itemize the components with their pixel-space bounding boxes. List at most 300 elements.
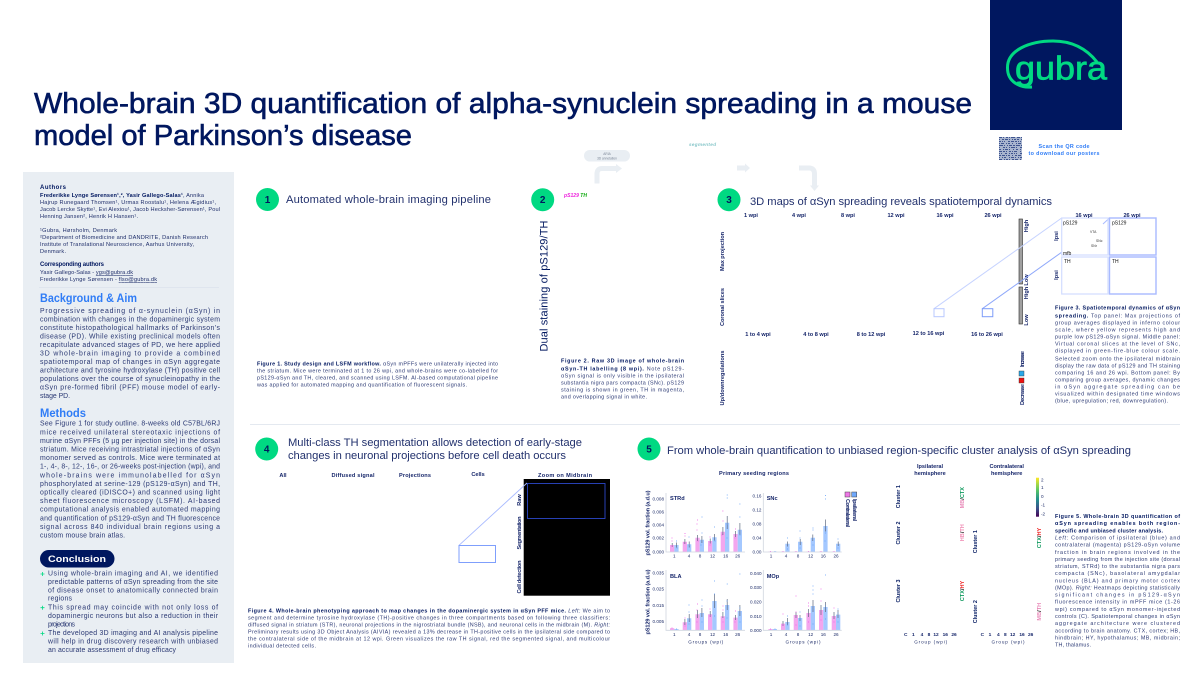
text: methods: murine αSyn PFFs (5 µg per injection site) in the dorsal [40, 438, 220, 445]
bar chart: BLA: 0.015 [652, 603, 664, 608]
text: methods: optically cleared (iDISCO+) and scanned using light [40, 490, 220, 496]
authors: Jacob Lercke Skytte¹, Evi Alexiou¹, Jacob Hecksher-Sørensen¹, Poul [40, 207, 220, 213]
bar chart: STRd: 0.002 [652, 536, 664, 540]
caption: figure 3: visualized within designated time windows [1055, 391, 1180, 397]
caption: figure 3: spreading. Top panel: Max projections of [1055, 313, 1180, 319]
bar chart: STRd: 0.006 [652, 510, 664, 514]
zoom panels: pS129 [1112, 220, 1127, 226]
caption: figure 5: primary seeding from the injection site (dorsal [1055, 557, 1180, 563]
heatmap x-axis: ipsilateral: Group (wpi) [914, 640, 948, 644]
text: methods: mice received unilateral stereotaxic injections of [40, 429, 220, 436]
bar chart: SNc: 0.12 [753, 508, 762, 512]
text: conclusion bullets: of disease onset to anatomically connected brain [48, 588, 218, 594]
arrow: bent up right [597, 164, 622, 184]
zoom boxes and connector lines [934, 218, 1110, 317]
chart heading: Primary seeding regions [719, 471, 789, 477]
caption: figure 5: significant changes in pS129-αSyn [1055, 593, 1180, 599]
heatmap x-axis: contralateral: 4 [997, 632, 1000, 638]
panel 3: 3D maps [718, 188, 1180, 406]
text: methods: See Figure 1 for study outline. 8-weeks old C57BL/6RJ [40, 421, 220, 428]
text: background [40, 308, 221, 400]
column labels: Cells [471, 472, 485, 478]
heading 4 [288, 437, 582, 462]
caption: figure 5: according to brain anatomy. CTX, cortex; HB, [1055, 628, 1180, 634]
colour scale: coronal: Low [1024, 314, 1030, 326]
heatmap x-axis: contralateral: 26 [1028, 632, 1034, 638]
arrow: right [737, 164, 750, 172]
badge 5 [638, 438, 660, 460]
caption: figure 3: comparing group averages, dynamic changes [1055, 377, 1180, 383]
bar chart: BLA: 8 [699, 632, 702, 637]
bar chart: STRd: 0.004 [652, 522, 664, 528]
logo: gubra [990, 0, 1122, 130]
bar chart: STRd: 26 [735, 554, 741, 558]
heading: background and aim: Background & Aim [40, 293, 137, 305]
text: methods: 1-, 4-, 8-, 12-, 16-, or 26-weeks post-injection (wpi), and [40, 464, 220, 471]
caption: figure 3: Figure 3. Spatiotemporal dynamics of αSyn [1055, 305, 1180, 311]
cluster labels [896, 485, 979, 623]
heading 5: From whole-brain quantification to unbiased region-specific cluster analysis of αSyn spreading [667, 445, 1131, 457]
row labels: Raw [517, 494, 523, 506]
cluster labels: Cluster 3 [896, 579, 902, 603]
logo: gubra: gubra [1015, 50, 1108, 86]
bar chart: SNc: 26 [833, 554, 839, 558]
caption: figure 4: segment and determine tyrosine hydroxylase (TH)-positive changes in three compartments based on following three classifiers: [248, 615, 610, 621]
region labels: HB/TH [960, 524, 966, 541]
authors [40, 185, 220, 283]
caption: figure 2: substantia nigra pars compacta (SNc). pS129 [561, 380, 684, 386]
text: methods [39, 421, 220, 540]
text: background: spatiotemporal map of changes in αSyn aggregate [40, 359, 220, 366]
QR code [999, 137, 1022, 160]
heading: methods: Methods [40, 408, 86, 420]
heatmap x-axis: contralateral: Group (wpi) [992, 640, 1025, 644]
caption: figure 5: controls (C). Spatiotemporal changes in αSyn [1055, 614, 1180, 620]
bar chart: MOp: 1 [770, 632, 773, 637]
text: conclusion bullets: Using whole-brain imaging and AI, we identified [48, 570, 218, 578]
bar chart: MOp: 0.000 [750, 628, 762, 633]
heatmap headers: hemisphere [991, 471, 1022, 477]
text: conclusion bullets: This spread may coincide with not only loss of [48, 604, 218, 611]
bar chart: STRd: 4 [688, 554, 691, 558]
caption: figure 3: group averages displayed in inferno colour [1055, 320, 1180, 326]
column labels: Zoom on Midbrain [538, 473, 593, 479]
text: conclusion bullets: predictable patterns of αSyn spreading from the site [48, 579, 218, 586]
caption: figure 2: αSyn-TH labelling (8 wpi). Note pS129- [561, 366, 684, 372]
column labels: time points: 8 wpi [841, 213, 855, 219]
heading 4: changes in neuronal projections before cell death occurs [288, 450, 566, 462]
zoom panels: 26 wpi [1123, 213, 1141, 219]
text: background: 3D whole-brain imaging to provide a combined [40, 350, 220, 358]
heatmap x-axis: ipsilateral: 12 [933, 632, 939, 638]
caption: figure 1: Figure 1. Study design and LSFM workflow. αSyn mPFFs were unilaterally injected into [257, 362, 498, 368]
y-axis labels: pS129 vol. fraction (a.d.u) [646, 490, 652, 556]
bar chart: STRd: 12 [710, 554, 715, 558]
caption: figure 2: and overlapping signal in white. [561, 394, 647, 400]
bar chart: SNc: 0.00 [753, 550, 762, 554]
caption: figure 1: was applied for automated mapping and quantification of fluorescent signals. [256, 382, 467, 388]
conclusion pill [40, 550, 114, 568]
cluster labels: Cluster 2 [896, 521, 902, 545]
column labels: Projections [399, 473, 431, 479]
authors: Frederikke Lynge Sørensen - flso@gubra.dk [40, 277, 157, 283]
bar chart: MOp: 26 [833, 632, 839, 637]
arrow: bent down [799, 168, 819, 191]
caption: figure 4: diffused signal in striatum (STR), neuronal projections in the nigrostriatal bundle (NSB), and neuronal cells in the midbrain (M). Right: [248, 622, 610, 628]
caption: figure 5: contralateral (magenta) pS129-αSyn volume [1055, 543, 1180, 549]
bar chart: MOp [750, 570, 842, 644]
bar chart: STRd: 8 [699, 554, 702, 558]
heatmap headers: hemisphere [914, 471, 946, 477]
caption: figure 3: in αSyn aggregate spreading can be [1055, 384, 1180, 390]
label: segmented: segmented [689, 142, 716, 147]
conclusion pill: Conclusion [48, 554, 106, 565]
bar chart: STRd: 0.008 [652, 496, 664, 502]
caption: figure 4: Preliminary results using 3D Object Analysis (AIVIA) revealed a 13% decrease in TH-positive cells in the ipsilateral side compared to [248, 629, 610, 635]
caption: figure 5: striatum, STRd) to the substantia nigra pars [1055, 564, 1180, 570]
caption: figure 3: displayed in green-fire-blue colour scale. [1055, 348, 1180, 354]
pipeline node: ARIA [584, 150, 630, 162]
row labels: Coronal slices [720, 288, 726, 326]
heatmap x-axis: ipsilateral: 16 [943, 632, 948, 638]
region labels [960, 487, 1043, 621]
caption: figure 5 [1054, 514, 1180, 648]
caption: figure 5: aggregate architecture were clustered [1055, 621, 1180, 627]
column labels: time points: 1 wpi [744, 213, 758, 219]
caption: figure 2: αSyn signal is only visible in the ipsilateral [561, 373, 684, 379]
caption: figure 2 [561, 358, 684, 400]
heatmap x-axis: ipsilateral: 1 [912, 632, 915, 638]
QR caption: to download our posters [1028, 151, 1100, 157]
bar chart: STRd: 0.000 [652, 550, 664, 554]
text: methods: and quantification of pS129-αSyn and TH fluorescence [40, 515, 220, 522]
zoom panels: Ipsi [1054, 231, 1060, 241]
zoom panels: TH [1112, 259, 1119, 265]
panel: sidebar [23, 172, 234, 663]
zoom panels: VTA [1090, 230, 1097, 234]
heatmap x-axis: contralateral: 8 [1004, 632, 1007, 638]
caption: figure 3: purple low pS129-αSyn signal. Middle panel: [1055, 334, 1180, 340]
authors: Institute of Translational Neuroscience, Aarhus University, [40, 242, 194, 248]
heatmap x-axis: contralateral [981, 632, 1034, 644]
bar chart: STRd [652, 493, 745, 558]
text: background: Progressive spreading of α-synuclein (αSyn) in [40, 308, 220, 315]
heading 4: Multi-class TH segmentation allows detection of early-stage [288, 437, 582, 449]
bar chart: BLA: 16 [723, 632, 729, 637]
caption: figure 5: hindbrain; HY, hypothalamus; MB, midbrain; [1055, 635, 1180, 641]
bar chart: BLA: Groups (wpi) [688, 640, 724, 644]
bar chart: BLA: 0.005 [652, 619, 664, 624]
column labels: time points: 4 wpi [792, 213, 806, 219]
column labels: All [279, 473, 287, 479]
panel 1: pipeline [256, 188, 498, 388]
column labels: Diffused signal [332, 473, 375, 479]
bar chart: STRd: 16 [723, 554, 729, 558]
authors: Denmark. [40, 249, 66, 255]
bar chart: SNc: 0.08 [753, 522, 762, 526]
bar chart: BLA: 0.035 [652, 570, 664, 576]
caption: figure 5: (MOp). Right: Heatmaps depicting statistically [1055, 586, 1180, 592]
cluster labels: Cluster 1 [973, 530, 979, 553]
zoom panels: SNr [1091, 244, 1098, 248]
text: conclusion bullets: an accurate assessment of drug efficacy [48, 647, 177, 654]
caption: figure 5: TH, thalamus. [1055, 642, 1091, 648]
caption: figure 4: Figure 4. Whole-brain phenotyping approach to map changes in the dopaminergic system in αSyn PFF mice. Left: We aim to [248, 608, 610, 614]
text: background: stage PD. [40, 393, 70, 400]
row labels [720, 231, 726, 406]
colour scale: coronal: High [1024, 286, 1030, 299]
bar chart: STRd: 1 [673, 554, 676, 558]
caption: figure 5: nucleus (BLA) and primary motor cortex [1055, 578, 1180, 584]
heatmap x-axis: ipsilateral: 8 [928, 632, 931, 638]
legend: increase and decrease: Decrease [1020, 384, 1026, 405]
region labels: MB/CTX [960, 487, 966, 508]
bar chart: MOp: 12 [808, 632, 814, 637]
caption: figure 1: pS129-αSyn and TH, cleared, and scanned using LSFM. AI-based computational pipeline [257, 375, 498, 381]
authors: ²Department of Biomedicine and DANDRITE, Danish Research [40, 235, 208, 241]
zoom panels: TH [1064, 259, 1071, 265]
bar chart: MOp: 0.010 [750, 614, 762, 619]
zoom panels: mfb [1063, 251, 1072, 257]
text: methods: whole-brains were immunolabelled for αSyn [39, 472, 220, 479]
pipeline node: ARIA: ARIA [603, 152, 612, 156]
bar chart: BLA: 1 [673, 632, 676, 637]
colour scale: heatmap: -2 [1041, 512, 1046, 516]
colour scale: heatmap: -1 [1041, 502, 1046, 508]
heatmap x-axis: ipsilateral: C [904, 632, 908, 638]
caption: figure 3: display the raw data of pS129 and TH staining [1055, 363, 1180, 369]
caption: figure 4: individual detected cells. [248, 643, 316, 649]
text: methods: phosphorylated at serine-129 (pS129-αSyn) and TH, [40, 481, 220, 488]
badge 1: 1 [265, 195, 271, 206]
badge 2: 2 [540, 195, 546, 206]
heatmap x-axis: ipsilateral [904, 632, 957, 644]
bar chart: BLA: 12 [710, 632, 715, 637]
caption: figure 5: compacta (SNc), basolateral amygdalar [1055, 571, 1180, 577]
bar chart: SNc: 4 [785, 554, 788, 558]
caption: figure 5: αSyn spreading enables both region- [1055, 521, 1180, 527]
bar chart: MOp: 0.040 [750, 571, 762, 576]
row labels [517, 494, 523, 594]
colour scale: heatmap: 1 [1041, 485, 1044, 490]
caption: figure 3: (blue, upregulation; red, downregulation). [1055, 398, 1168, 404]
text: conclusion bullets: dopaminergic neurons but also a reduction in their [48, 613, 219, 620]
chart legend: Contralateral [844, 499, 850, 527]
text: conclusion bullets: will help in drug discovery research with unbiased [47, 638, 218, 646]
title: Whole-brain 3D quantification of alpha-synuclein spreading in a mouse [34, 88, 972, 120]
legend: increase and decrease [1019, 351, 1026, 405]
cluster labels: Cluster 2 [973, 600, 979, 623]
column labels: time points [744, 213, 1002, 219]
bar chart: SNc: 8 [797, 554, 800, 558]
bar chart: SNc: 1 [770, 554, 773, 558]
midbrain zoom image [524, 479, 610, 596]
legend: increase and decrease: Increase [1020, 351, 1026, 367]
bar chart: SNc: 0.04 [753, 536, 762, 540]
bar chart: SNc: 16 [821, 554, 826, 558]
bar chart: SNc: 12 [808, 554, 814, 558]
channel legend: pS129 TH [563, 193, 587, 199]
heatmap headers: Ipsilateral [917, 464, 944, 470]
text: background: constitute histopathological hallmarks of Parkinson’s [40, 325, 221, 332]
panel 2: raw image [531, 188, 684, 400]
text: methods: custom mouse brain atlas. [40, 532, 125, 540]
bar chart: BLA: 26 [735, 632, 741, 637]
authors: Authors [40, 185, 67, 191]
authors: Hajrup Runegaard Thomsen¹, Urmas Roostalu¹, Helena Ægidius¹, [40, 200, 216, 206]
authors: Yasir Gallego-Salas - ygs@gubra.dk [40, 270, 133, 276]
caption: figure 3: comparing 16 and 26 wpi. Bottom panel: By [1055, 370, 1180, 376]
text: background: combination with changes in the dopaminergic system [40, 316, 220, 324]
text: methods: sheet fluorescence microscopy (LSFM). AI-based [40, 498, 220, 505]
caption: figure 5: wpi) compared to αSyn monomer-injected [1054, 607, 1180, 613]
region labels: CTX/HY [960, 580, 966, 601]
heading 1: Automated whole-brain imaging pipeline [286, 194, 491, 206]
row labels: Segmentation [517, 516, 523, 550]
text: conclusion bullets: The developed 3D imaging and AI analysis pipeline [48, 630, 218, 637]
colour scale: heatmap: 0 [1041, 494, 1044, 499]
text: methods: striatum. Mice receiving intrastriatal injections of αSyn [40, 446, 220, 454]
caption: figure 5: fraction in brain regions involved in the [1055, 550, 1180, 556]
heatmap x-axis: contralateral: C [981, 632, 985, 638]
column labels: time windows: 12 to 16 wpi [913, 331, 945, 337]
text: background: recapitulate advanced stages of PD, we here applied [40, 342, 220, 349]
bar chart: MOp: MOp [767, 574, 780, 580]
title: model of Parkinson’s disease [34, 120, 412, 152]
y-axis labels [646, 490, 652, 634]
text: background: disease (PD). While existing preclinical models often [40, 334, 220, 340]
column labels: time points: 26 wpi [984, 213, 1002, 219]
column labels [279, 472, 593, 479]
column labels: time windows: 4 to 8 wpi [803, 332, 829, 338]
bar chart: BLA: 4 [688, 632, 691, 637]
pipeline node: ARIA: 3D annotation [597, 156, 617, 160]
text: conclusion bullets: regions [48, 596, 73, 602]
caption: figure 4 [248, 608, 610, 649]
authors: Corresponding authors [40, 262, 105, 268]
bar chart: SNc [753, 493, 842, 558]
bar chart: BLA: 0.025 [652, 586, 664, 592]
zoom panels [1054, 213, 1156, 294]
caption: figure 1 [256, 362, 498, 388]
caption: figure 3: Selected zoom onto the ipsilateral midbrain [1055, 356, 1180, 362]
text: methods: monomer served as controls. Mice were terminated at [40, 455, 220, 462]
heatmap x-axis: contralateral: 16 [1019, 632, 1025, 638]
row labels: Up/downregulations [720, 350, 726, 406]
column labels: time windows: 1 to 4 wpi [745, 332, 771, 338]
bar chart: BLA [652, 570, 745, 644]
text: background: populations over the course of synucleinopathy in the [40, 376, 220, 383]
heading 3: 3D maps of αSyn spreading reveals spatiotemporal dynamics [750, 196, 1052, 208]
row labels: Max projection [720, 231, 726, 271]
region labels: MB/TH [1037, 603, 1043, 621]
bar chart: MOp: 4 [785, 632, 788, 637]
text: conclusion bullets: projections [48, 622, 76, 628]
caption: figure 1: the striatum. Mice were terminated at 1 to 26 wpi, and whole-brains were co-labelled for [257, 368, 498, 374]
badge 1 [256, 188, 279, 211]
text: methods: signal across 840 individual brain regions using a [40, 524, 220, 531]
zoom panels: SNc [1096, 239, 1103, 243]
caption: figure 5: fluorescence intensity in mPFF mice (1-26 [1055, 600, 1180, 606]
QR caption [1028, 144, 1100, 157]
heatmap headers: Contralateral [989, 464, 1024, 470]
chart legend: Ipsilateral [851, 499, 857, 521]
zoom panels: 16 wpi [1075, 213, 1093, 219]
bar chart: MOp: 8 [797, 632, 800, 637]
bar chart: MOp: 16 [821, 632, 826, 637]
heatmap headers [914, 464, 1024, 477]
caption: figure 3: scale, where yellow represents high and [1055, 327, 1180, 333]
column labels: time windows: 8 to 12 wpi [857, 332, 886, 338]
bar chart: MOp: 0.020 [750, 600, 762, 604]
bar chart: SNc: 0.16 [753, 494, 762, 498]
caption: figure 3 [1055, 305, 1180, 404]
column labels: time windows [745, 331, 1003, 338]
colour scale: coronal [1019, 286, 1030, 326]
panel 4: TH segmentation [248, 437, 610, 649]
zoom panels: pS129 [1063, 220, 1078, 226]
column labels: time points: 12 wpi [887, 213, 905, 219]
colour scale: heatmap [1036, 478, 1046, 517]
badge 5: 5 [646, 444, 652, 456]
bar chart: MOp: Groups (wpi) [786, 640, 821, 644]
badge 3 [718, 188, 740, 211]
caption: figure 5: specific and unbiased cluster analysis. [1055, 528, 1164, 534]
colour scale: max projection [1019, 219, 1030, 286]
rotated label: dual staining: Dual staining of pS129/TH [538, 220, 550, 352]
badge 2 [531, 188, 554, 211]
QR caption: Scan the QR code [1038, 144, 1090, 150]
text: background: architecture and tyrosine hydroxylase (TH) positive cell [40, 368, 220, 374]
colour scale: heatmap: 2 [1041, 478, 1044, 482]
row labels: Cell detection [517, 560, 523, 594]
text: background: αSyn pre-formed fibril (PFF) mouse model of early- [40, 384, 220, 392]
authors: ¹Gubra, Hørsholm, Denmark [40, 228, 117, 234]
authors: Frederikke Lynge Sørensen¹,², Yasir Gallego-Salas¹, Annika [40, 192, 205, 199]
heatmap x-axis: contralateral: 1 [989, 632, 992, 638]
heatmap x-axis: ipsilateral: 4 [921, 632, 924, 638]
zoom marker [459, 483, 527, 562]
colour scale: max projection: Low [1024, 274, 1030, 286]
region labels: CTX/HY [1037, 527, 1043, 548]
caption: figure 3: Virtual coronal slices at the level of SNc, [1055, 341, 1180, 347]
title [34, 88, 972, 152]
bar chart: BLA: BLA [670, 574, 682, 580]
y-axis labels: pS129 vol. fraction (a.d.u) [646, 569, 652, 634]
chart legend [844, 492, 857, 527]
colour scale: max projection: High [1024, 219, 1030, 232]
authors: Henning Jansen², Henrik H Hansen¹. [40, 214, 138, 220]
column labels: time points: 16 wpi [936, 213, 954, 219]
bar chart: MOp: 0.030 [750, 585, 762, 590]
badge 4 [255, 438, 278, 460]
caption: figure 2: staining is shown in green, TH in magenta, [561, 387, 684, 393]
caption: figure 5: Figure 5. Whole-brain 3D quantification of [1055, 514, 1180, 520]
panel 5: cluster analysis [638, 438, 1180, 648]
bar chart: STRd: STRd [670, 496, 685, 502]
caption: figure 5: Left: Comparison of ipsilateral (blue) and [1055, 536, 1180, 542]
heatmap x-axis: ipsilateral: 26 [951, 632, 957, 638]
zoom panels: Ipsi [1054, 270, 1060, 280]
text: conclusion bullets [40, 570, 219, 654]
badge 4: 4 [264, 444, 270, 456]
caption: figure 4: the contralateral side of the midbrain at 12 wpi. Green visualizes the raw TH signal, red the segmented signal, and multicolour [248, 636, 610, 642]
caption: figure 2: Figure 2. Raw 3D image of whole-brain [561, 358, 684, 364]
heatmap x-axis: contralateral: 12 [1010, 632, 1016, 638]
column labels: time windows: 16 to 26 wpi [971, 332, 1003, 338]
bar chart: SNc: SNc [767, 496, 778, 502]
badge 3: 3 [726, 195, 732, 206]
